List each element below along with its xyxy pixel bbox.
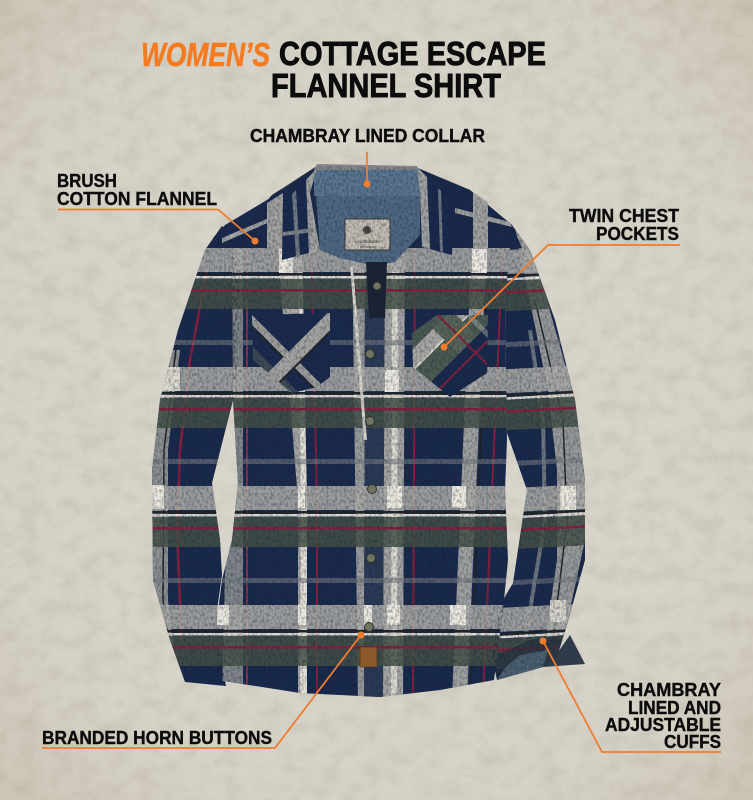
title: FLANNEL SHIRT: [271, 67, 501, 104]
callout: chambray lined and adjustable cuffs: [540, 638, 721, 752]
callout: twin chest pockets: [440, 206, 680, 350]
leather patch: [360, 647, 377, 667]
callout: brush cotton flannel: BRUSH: [57, 171, 117, 191]
shoulder yoke: [213, 166, 522, 248]
neck label: LEGENDARY: [355, 239, 380, 244]
callout: chambray lined collar: CHAMBRAY LINED COLLAR: [250, 126, 485, 146]
callout: chambray lined and adjustable cuffs: ADJUSTABLE: [605, 715, 721, 735]
callout: branded horn buttons: [42, 632, 364, 748]
title: [141, 35, 546, 104]
title: WOMEN’S: [141, 36, 270, 73]
collar band: [314, 168, 420, 196]
neck label: [345, 219, 390, 250]
chambray inner collar: [314, 170, 420, 266]
callout: chambray lined collar: [250, 126, 485, 188]
neck opening: [366, 262, 387, 318]
callout: twin chest pockets: POCKETS: [596, 224, 679, 244]
chambray cuff: [497, 650, 548, 680]
left chest pocket: [252, 313, 330, 393]
right sleeve: [495, 225, 585, 680]
collar top edge: [314, 164, 418, 170]
shirt body: [210, 160, 520, 705]
callout: branded horn buttons: BRANDED HORN BUTTONS: [42, 728, 272, 748]
callout: brush cotton flannel: COTTON FLANNEL: [57, 189, 217, 209]
collar right wing: [417, 167, 453, 255]
title: COTTAGE ESCAPE: [279, 35, 546, 72]
right chest pocket: [412, 315, 488, 397]
callout: chambray lined and adjustable cuffs: LINED AND: [628, 698, 721, 718]
collar left wing: [282, 168, 320, 260]
shirt illustration: [140, 160, 600, 705]
callout: brush cotton flannel: [57, 171, 258, 244]
cuff tail: [543, 635, 585, 667]
callout: twin chest pockets: TWIN CHEST: [569, 206, 679, 226]
left placket edge: [350, 266, 367, 440]
callout: chambray lined and adjustable cuffs: CUFFS: [664, 732, 721, 752]
callout: chambray lined and adjustable cuffs: CHAMBRAY: [617, 680, 721, 700]
grain overlay: [140, 160, 600, 700]
yoke stripes: [222, 192, 512, 248]
neck label: WHITETAILS: [360, 246, 375, 249]
buttons: [364, 282, 381, 632]
left sleeve: [152, 226, 233, 686]
